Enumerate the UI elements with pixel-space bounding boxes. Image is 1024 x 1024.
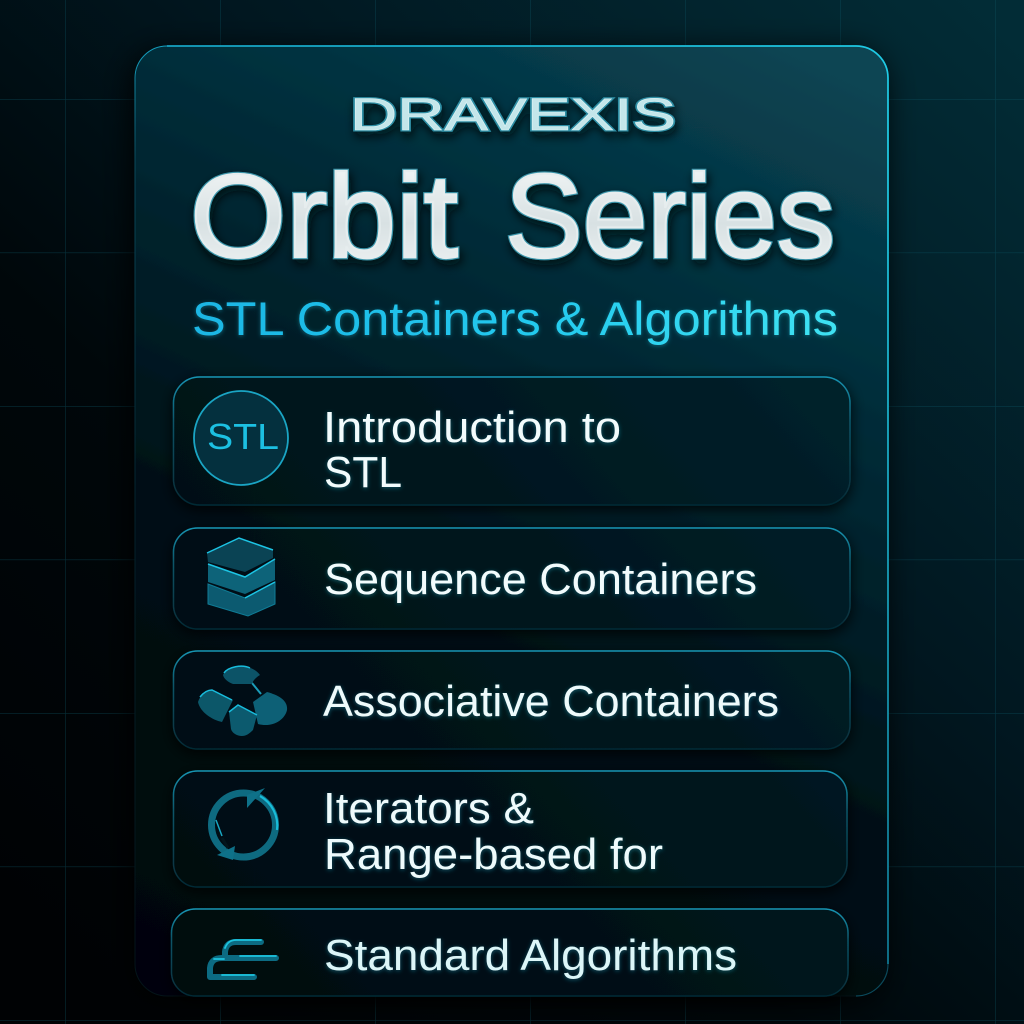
title: Orbit (190, 150, 458, 283)
row label: Standard Algorithms (324, 931, 737, 980)
subtitle: STL Containers & Algorithms (192, 292, 838, 345)
panel: row 5 Standard Algorithms (172, 909, 848, 996)
panel: row 4 Iterators and Range-based for (174, 771, 847, 887)
icon: connected nodes (198, 666, 287, 736)
brand name: DRAVEXIS (350, 89, 676, 140)
icon: circular arrows (212, 788, 277, 860)
title: Series (505, 150, 835, 283)
icon: stacked layers (207, 538, 275, 616)
row label: Iterators & (323, 784, 534, 833)
icon: STL badge: STL (207, 416, 279, 457)
row label line 2: STL (324, 448, 402, 497)
brand name: DRAVEXIS (350, 89, 676, 140)
icon: algorithm bars (210, 940, 276, 977)
title: Series (505, 150, 835, 283)
brand name (350, 89, 676, 140)
row label: Associative Containers (323, 677, 779, 726)
row label line 2: Range-based for (324, 830, 663, 879)
row label: Sequence Containers (324, 555, 757, 604)
title: Orbit (190, 150, 458, 283)
panel: row 1 Introduction to STL (174, 377, 850, 505)
panel: row 3 Associative Containers (174, 651, 850, 749)
panel: main card (135, 46, 888, 996)
icon: STL badge (194, 391, 288, 485)
panel: row 2 Sequence Containers (174, 528, 850, 629)
row label: Introduction to (323, 403, 621, 452)
title (190, 150, 835, 283)
